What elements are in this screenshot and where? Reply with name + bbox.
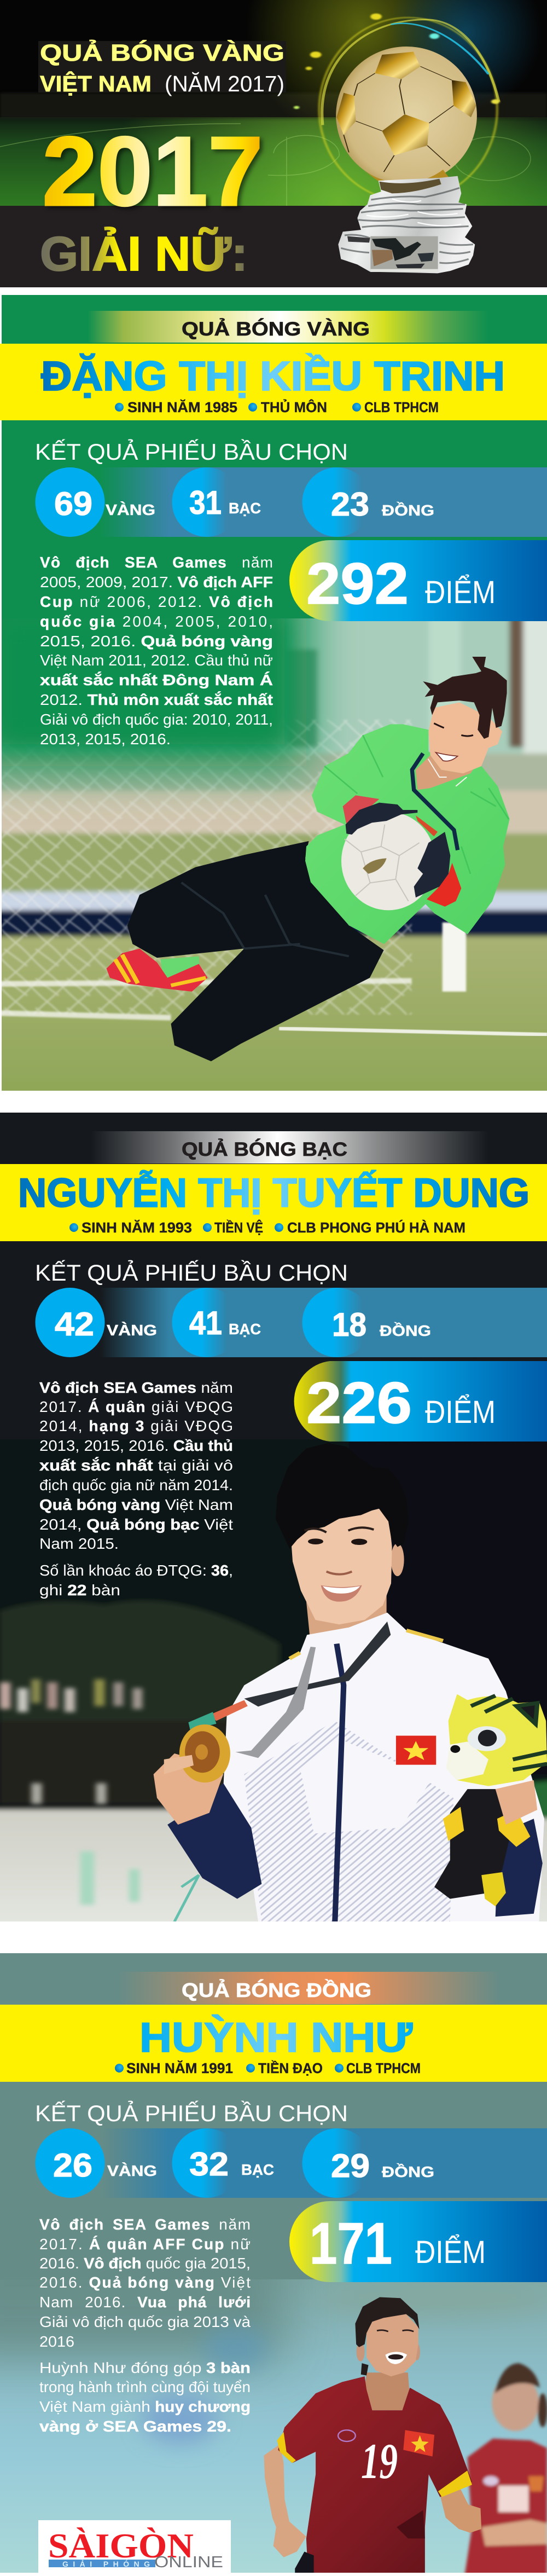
player facts: THỦ MÔN [261, 398, 327, 415]
achievements text: 2017. Á quân AFF Cup nữ [39, 2236, 251, 2253]
vote tally bar [35, 1288, 547, 1357]
section background [2, 295, 547, 623]
achievements text: Huỳnh Như đóng góp 3 bàn [39, 2359, 251, 2376]
subheading: golden ball: QUẢ BÓNG VÀNG [182, 318, 370, 340]
player facts: SINH NĂM 1991 [126, 2060, 233, 2076]
achievements text: Vô địch SEA Games năm [40, 554, 273, 571]
achievements text: quốc gia 2004, 2005, 2010, [40, 613, 273, 630]
achievements text: 2005, 2009, 2017. Vô địch AFF [40, 574, 273, 591]
panel: Nguyễn Thị Tuyết Dung [0, 1113, 547, 1929]
logo: Sài Gòn Giải Phóng Online: SÀIGÒN [48, 2526, 194, 2565]
achievements text: xuất sắc nhất tại giải vô [39, 1457, 233, 1474]
player name: HUỲNH NHƯ [139, 2015, 413, 2061]
total score: 226 [306, 1370, 412, 1435]
section background [0, 1953, 547, 2336]
achievements text: 2016 [39, 2333, 74, 2350]
total score [289, 540, 547, 621]
jersey number: 19 [361, 2433, 398, 2489]
achievements text: Nam 2016. Vua phá lưới [39, 2294, 251, 2311]
header stadium background [0, 0, 547, 206]
logo: Sài Gòn Giải Phóng Online [38, 2520, 231, 2573]
total score: ĐIỂM [425, 1394, 496, 1430]
tiger mascot [434, 1694, 547, 1906]
achievements text: Số lần khoác áo ĐTQG: 36, [39, 1562, 233, 1579]
icon: golden ball trophy [294, 14, 499, 273]
goalkeeper head [412, 657, 507, 850]
vote tally bar [35, 2128, 547, 2198]
player name: NGUYỄN THỊ TUYẾT DUNG [18, 1170, 529, 1215]
title: VIỆT NAM [40, 71, 152, 96]
vote tally bar: 41 [189, 1305, 222, 1341]
total score: ĐIỂM [425, 575, 496, 610]
striker jersey [277, 2376, 472, 2576]
hand and gold medal [154, 1724, 230, 1825]
vote tally bar: ĐỒNG [380, 1322, 431, 1339]
achievements text: 2012. Thủ môn xuất sắc nhất [40, 691, 273, 708]
achievements text [40, 554, 273, 748]
player facts: CLB TPHCM [346, 2060, 421, 2076]
vote tally bar: VÀNG [106, 501, 155, 518]
yellow name band [0, 2005, 547, 2082]
yellow name band [0, 344, 547, 420]
achievements text: 2015, 2016. Quả bóng vàng [40, 633, 273, 650]
vote tally bar: ĐỒNG [382, 502, 434, 519]
title: QUẢ BÓNG VÀNG [40, 39, 284, 66]
achievements text: 2013, 2015, 2016. [40, 731, 171, 748]
dark band [0, 206, 547, 287]
vote tally bar: 18 [332, 1306, 366, 1343]
vote tally bar: BẠC [229, 1321, 261, 1338]
achievements text: Việt Nam giành huy chương [39, 2398, 251, 2415]
year 2017: 2017 [42, 117, 263, 227]
achievements text: 2016. Vô địch quốc gia 2015, [39, 2255, 251, 2272]
achievements text: vàng ở SEA Games 29. [39, 2418, 231, 2435]
achievements text: Cup nữ 2006, 2012. Vô địch [40, 593, 273, 610]
total score: 292 [306, 551, 409, 616]
subheading band [88, 311, 488, 343]
subheading: bronze ball: QUẢ BÓNG ĐỒNG [182, 1978, 371, 2001]
player facts: TIỀN ĐẠO [258, 2060, 323, 2076]
heading: vote results: KẾT QUẢ PHIẾU BẦU CHỌN [35, 1259, 348, 1286]
logo: Sài Gòn Giải Phóng Online: ONLINE [154, 2554, 223, 2571]
vote tally bar: 26 [53, 2147, 92, 2184]
vote tally bar: 42 [55, 1306, 94, 1342]
player facts [69, 1219, 465, 1236]
achievements text: Quả bóng vàng Việt Nam [39, 1496, 233, 1513]
section background [0, 1113, 547, 1496]
medal ribbon [188, 1622, 391, 1758]
heading: vote results: KẾT QUẢ PHIẾU BẦU CHỌN [35, 2100, 348, 2126]
goalkeeper jersey [305, 724, 510, 944]
player facts: CLB TPHCM [364, 399, 439, 415]
vote tally bar: BẠC [241, 2161, 274, 2178]
achievements text: ghi 22 bàn [39, 1582, 120, 1599]
achievements text: 2014, Quả bóng bạc Việt [39, 1516, 233, 1533]
flag patch [396, 1736, 436, 1765]
total score: 171 [310, 2210, 392, 2276]
total score [294, 1361, 547, 1442]
vote tally bar: VÀNG [107, 1322, 157, 1339]
total score [289, 2201, 547, 2282]
total score: ĐIỂM [415, 2235, 486, 2270]
heading: women's award: GIẢI NỮ: [40, 227, 248, 281]
achievements text: 2016. Quả bóng vàng Việt [39, 2274, 251, 2291]
player name: ĐẶNG THỊ KIỀU TRINH [41, 353, 505, 399]
player facts [115, 2060, 421, 2076]
title backing [38, 41, 286, 92]
panel: header [0, 0, 547, 287]
vote tally bar: 29 [331, 2147, 370, 2184]
player jacket [167, 1613, 544, 1921]
vote tally bar [35, 467, 547, 537]
yellow name band [0, 1164, 547, 1241]
striker head [355, 2297, 420, 2410]
title: (NĂM 2017) [165, 71, 284, 96]
vote tally bar: BẠC [229, 500, 261, 517]
goalkeeper trousers [127, 841, 384, 1061]
striker arms [264, 2444, 481, 2557]
title [40, 39, 284, 96]
achievements text: Vô địch SEA Games năm [39, 2216, 251, 2233]
achievements text [39, 2216, 251, 2435]
player facts: SINH NĂM 1985 [127, 399, 237, 415]
achievements text: địch quốc gia nữ năm 2014. [39, 1477, 233, 1493]
achievements text: Vô địch SEA Games năm [39, 1379, 233, 1396]
panel: Đặng Thị Kiều Trinh [0, 295, 547, 1099]
achievements text: Nam 2015. [39, 1535, 119, 1552]
teammate blurred [464, 2363, 547, 2576]
achievements text: 2017. Á quân giải VĐQG [39, 1398, 233, 1415]
achievements text: 2013, 2015, 2016. Cầu thủ [39, 1437, 233, 1454]
goalkeeper gloves [343, 795, 461, 907]
vote tally bar: VÀNG [107, 2162, 157, 2179]
football [341, 812, 438, 910]
achievements text: Giải vô địch quốc gia 2013 và [39, 2313, 251, 2330]
photo: player with medal [0, 1433, 547, 1929]
player facts: TIỀN VỆ [214, 1219, 263, 1236]
goalkeeper shoe [107, 948, 207, 992]
subheading band [91, 1131, 488, 1163]
player facts: CLB PHONG PHÚ HÀ NAM [287, 1219, 465, 1236]
achievements text: trong hành trình cùng đội tuyển [39, 2378, 251, 2395]
achievements text [39, 1379, 233, 1599]
vote tally bar: ĐỒNG [382, 2163, 434, 2180]
vote tally bar: 32 [189, 2146, 229, 2183]
vote tally bar: 31 [189, 484, 222, 521]
player head [276, 1443, 409, 1643]
logo: Sài Gòn Giải Phóng Online: GIẢI PHÓNG [62, 2559, 150, 2568]
achievements text: Giải vô địch quốc gia: 2010, 2011, [40, 711, 273, 728]
photo: goalkeeper diving [2, 618, 547, 1091]
panel: Huỳnh Như [0, 1953, 547, 2576]
achievements text: Việt Nam 2011, 2012. Cầu thủ nữ [40, 652, 273, 669]
subheading band [119, 1972, 499, 2004]
achievements text: 2014, hạng 3 giải VĐQG [39, 1417, 233, 1434]
subheading: silver ball: QUẢ BÓNG BẠC [182, 1138, 347, 1160]
fade to section colour [0, 547, 306, 766]
heading: vote results: KẾT QUẢ PHIẾU BẦU CHỌN [35, 438, 348, 465]
photo: striker celebrating [0, 2216, 547, 2576]
vote tally bar: 23 [331, 486, 369, 523]
player facts [115, 398, 439, 415]
achievements text: xuất sắc nhất Đông Nam Á [40, 672, 273, 688]
vote tally bar: 69 [54, 485, 92, 522]
player facts: SINH NĂM 1993 [82, 1219, 192, 1236]
